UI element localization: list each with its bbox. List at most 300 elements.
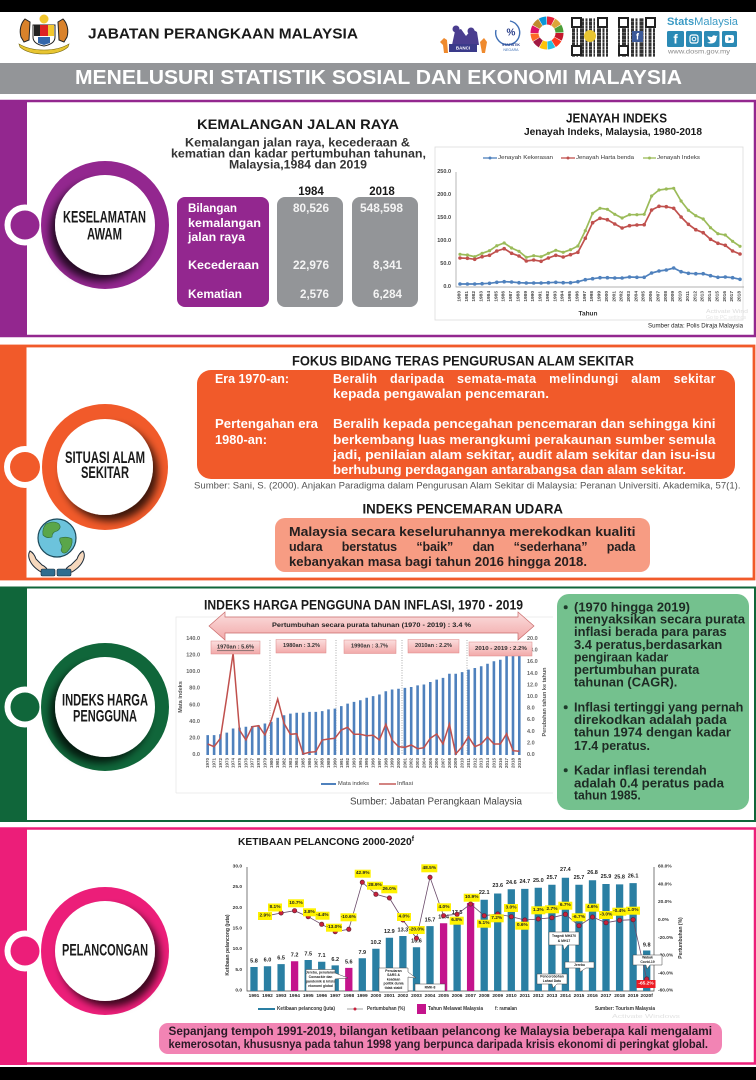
x axis years: 1979 [262,758,267,768]
combo chart: tourist arrivals: 28.9% [368,882,383,888]
x axis years: 1999 [390,758,395,768]
combo chart: tourist arrivals: 6.8% [451,917,463,923]
icon: QR code two: f [636,32,640,42]
bar value labels: 25.9 [601,874,611,880]
section badge: indeks harga pengguna: PENGGUNA [73,706,137,726]
combo chart: tourist arrivals: Tragedi MH370 [552,934,576,938]
left axis labels: 30.0 [233,864,242,870]
right axis labels: -60.0% [658,988,674,994]
x axis years: 1995 [364,758,369,768]
combo chart: tourist arrivals: & MH17 [558,939,570,943]
text block: environmental focus eras: Beralih kepada pencegahan pencemaran dan sehingga kini [333,417,716,431]
text block: inflation findings: direkodkan adalah pada [574,713,728,727]
combo chart: tourist arrivals: 2.9% [260,912,271,918]
x axis years: 2016 [722,291,728,302]
text block: inflation findings: menyaksikan secara purata [574,613,746,627]
bar value labels: 10.6 [411,938,422,944]
combo chart: tourist arrivals: Jerebu [574,963,585,967]
text block: air quality: kebanyakan masa bagi tahun 2016 hingga 2018. [289,555,587,569]
table: road accidents: 80,526 [293,201,329,215]
x axis years: 2002 [398,993,409,999]
combo chart: tourist arrivals: pandemik & krisis [306,980,335,984]
x axis years [205,758,522,768]
header: department logo and name [19,14,739,56]
text block: inflation findings: 17.4 peratus. [574,739,650,753]
decade growth labels: 1970an : 5.6% [217,644,254,650]
y axis left labels: 120.0 [186,653,200,659]
combo chart: tourist arrivals: Penularan [385,969,402,973]
y axis right labels: 20.0 [527,636,538,642]
x axis years: 1986 [501,291,507,302]
combo chart: tourist arrivals: Pencerobohan [540,974,564,978]
icon: hari statistik negara: NEGARA [503,48,519,52]
heading: jenayah indeks: JENAYAH INDEKS [566,110,667,126]
icon: earth in hands [29,519,84,576]
bar value labels: 25.8 [614,874,625,880]
x axis years: 2008 [663,291,669,302]
decade growth labels: 2010an : 2.2% [415,643,452,649]
x axis years: 1991 [249,993,260,999]
combo chart: tourist arrivals: politik dunia [384,982,404,986]
section badge: keselamatan awam: KESELAMATAN [63,208,146,226]
y axis left labels: 0.0 [192,752,200,758]
x axis years: 1985 [301,758,306,768]
bar value labels: 9.8 [643,942,651,948]
x axis years: 2000 [371,993,382,999]
y axis right labels: 14.0 [527,671,538,677]
combo chart: tourist arrivals: RMK-8 [425,986,435,990]
x axis years: 2007 [440,758,446,768]
chart legend: Inflasi [397,781,413,787]
x axis years: 1984 [486,291,492,302]
x axis years: 1973 [224,758,229,768]
text block: tourism summary [159,1023,722,1054]
y axis right labels: 16.0 [527,659,538,665]
right axis labels: -40.0% [658,970,674,976]
panel: keselamatan awam [0,100,755,337]
text block: environmental focus eras: Pertengahan era [215,417,319,431]
line chart: jenayah indeks: 150.0 [437,215,451,221]
x axis years: 1994 [289,993,300,999]
combo chart: tourist arrivals: Lahad Datu [543,979,561,983]
StatsMalaysia brand: www.dosm.gov.my [667,48,731,56]
StatsMalaysia brand [667,16,739,56]
x axis years: 2009 [670,291,676,302]
subheading: table description [171,138,426,172]
subheading: jenayah indeks chart: Jenayah Indeks, Malaysia, 1980-2018 [524,126,702,138]
x axis years: 1982 [282,758,286,768]
x axis years: 1998 [383,758,388,768]
chart legend: Jenayah Kekerasan [498,155,553,161]
x axis years: 2004 [421,758,426,768]
x axis years: 1976 [243,758,248,768]
x axis years: 1994 [358,758,363,768]
text block: inflation findings: pertumbuhan purata [574,663,700,677]
x axis years: 2010 [506,993,517,999]
x axis years: 2004 [633,291,639,302]
combo chart: cpi bars and inflation line [176,612,553,793]
x axis years: 2007 [656,291,662,302]
x axis years: 2019 [517,758,522,768]
y axis left labels [186,636,200,758]
left axis labels: 5.0 [235,967,242,973]
title banner: MENELUSURI STATISTIK SOSIAL DAN EKONOMI MALAYSIA [75,67,682,89]
x axis years: 2017 [504,758,509,768]
combo chart: tourist arrivals: -3.0% [600,912,613,918]
label: 2020 decline: -65.2% [638,980,654,986]
x axis years: 2014 [485,758,490,768]
combo chart: tourist arrivals: 42.9% [356,870,370,876]
table: road accidents: 2018 [369,186,395,198]
x axis years: 1981 [464,291,470,302]
x axis years: 1994 [560,291,566,302]
series: arrivals bars [254,878,647,991]
table: road accidents: 548,598 [360,201,403,215]
x axis years: 2003 [415,758,420,768]
chart legend: Pertumbuhan (%) [367,1006,405,1012]
x axis years: 2016 [498,758,503,768]
source: jabatan perangkaan malaysia: Sumber: Jabatan Perangkaan Malaysia [350,796,522,808]
chart legend: f: ramalan [495,1006,517,1012]
y axis right labels: 0.0 [527,752,535,758]
table: road accidents: Bilangan [188,201,237,215]
x axis years: 2013 [700,291,706,302]
left axis labels: 20.0 [233,905,242,911]
bar value labels: 5.8 [250,958,258,964]
combo chart: tourist arrivals: ekonomi global [308,984,333,988]
y axis right labels: 8.0 [527,706,535,712]
combo chart: tourist arrivals: 48.5% [422,865,437,871]
x axis years: 1980 [456,291,462,302]
x axis years: 2013 [479,758,484,768]
bar value labels: 6.2 [331,957,339,963]
icon: hari statistik negara: STATISTIK [502,43,520,47]
series: visit malaysia year bars [295,903,471,991]
text block: inflation findings: tahun 1974 dengan kadar [574,726,731,740]
x axis years: 2014 [707,291,713,302]
y axis right labels: 4.0 [527,729,535,735]
y axis left labels: 100.0 [186,669,200,675]
x axis years: 1999 [596,291,602,302]
heading: fokus bidang teras: FOKUS BIDANG TERAS PENGURUSAN ALAM SEKITAR [292,354,634,368]
department name: JABATAN PERANGKAAN MALAYSIA [88,26,358,42]
x axis years: 1974 [231,758,236,768]
heading: ketibaan pelancong: KETIBAAN PELANCONG 2000-2020 [238,836,415,848]
series: inflasi line [208,653,519,754]
bar value labels: 24.6 [506,880,517,886]
combo chart: tourist arrivals: 3.8% [304,909,315,915]
x axis years: 1985 [493,291,499,302]
series: mata indeks bars [208,654,519,755]
series: jenayah harta benda [460,206,740,261]
top black bar [0,0,756,12]
series: growth line [268,877,647,979]
bar value labels: 7.5 [304,952,312,958]
text block: inflation findings: pengiraan kadar [574,650,668,664]
x axis years: 2000 [604,291,610,302]
x axis years: 1998 [589,291,595,302]
combo chart: tourist arrivals: -10.6% [341,914,357,920]
section badge: situasi alam sekitar [4,404,168,530]
text block: environmental focus eras: Beralih daripada semata-mata melindungi alam sekitar [333,372,716,386]
x axis years: 1993 [552,291,558,302]
panel: pelancongan [0,828,755,1065]
chart legend [258,1004,655,1014]
combo chart: tourist arrivals: tidak stabil [385,986,402,990]
chart legend: Ketibaan pelancong (juta) [277,1006,335,1012]
combo chart: tourist arrivals: Jerebu, penularan [306,970,335,974]
table: road accidents: Kecederaan [188,258,259,272]
combo chart: tourist arrivals: 10.9% [465,894,479,900]
y axis right labels: 18.0 [527,648,538,654]
source: sani 2000: Sumber: Sani, S. (2000). Anjakan Paradigma dalam Pengurusan Alam Sekitar di Malaysia: Peranan Universiti. Akademika, 57(1). [194,480,740,492]
text block: air quality [275,518,650,572]
x axis years: 2011 [520,993,530,999]
chart legend: Sumber: Tourism Malaysia [595,1006,655,1012]
panel: situasi alam sekitar [0,345,754,580]
y axis left labels: 20.0 [189,735,200,741]
line chart: jenayah indeks: Activate Wind [706,309,748,315]
bar value labels: 17.5 [452,910,462,916]
y axis left labels: 60.0 [189,702,200,708]
chart legend: Jenayah Harta benda [576,155,635,161]
right axis labels: 60.0% [658,864,672,870]
x axis years: 1991 [538,291,544,302]
left axis labels: 10.0 [233,946,242,952]
combo chart: tourist arrivals: keadaan [387,978,400,982]
x axis years: 2012 [472,758,477,768]
combo chart: tourist arrivals: 4.0% [439,904,450,910]
x axis years: 2007 [465,993,476,999]
x axis years: 2008 [479,993,490,999]
x axis years: 1989 [523,291,529,302]
chart legend: Mata indeks [338,781,369,787]
x axis years: 1980 [269,758,274,768]
icon: coat of arms [19,14,69,54]
bar value labels: 26.8 [587,870,598,876]
text block: inflation findings: (1970 hingga 2019) [574,600,690,614]
x axis years: 1998 [343,993,354,999]
y axis right labels: 2.0 [527,740,535,746]
line chart: jenayah indeks: 250.0 [437,169,451,175]
bar value labels: 22.1 [479,890,490,896]
x axis years: 2017 [601,993,612,999]
x axis years: 1997 [330,993,341,999]
text block: inflation findings: Kadar inflasi terendah [574,763,707,777]
table: road accidents: 8,341 [373,258,402,272]
x axis years: 1982 [471,291,477,302]
y axis right labels: 12.0 [527,682,538,688]
combo chart: cpi bars and inflation line: Perubahan tahun ke tahun [542,667,548,737]
x axis years: 2013 [547,993,558,999]
x axis years: 2011 [685,291,691,301]
x axis years: 1995 [303,993,314,999]
text block: environmental focus eras: Era 1970-an: [215,372,289,386]
x axis years: 1989 [326,758,331,768]
text block: environmental focus eras: jadi, penilaian alam sekitar, audit alam sekitar dan isu-isu [332,448,716,462]
x axis years: 1997 [377,758,382,768]
line chart: jenayah indeks: 200.0 [437,192,451,198]
x axis years: 1999 [357,993,368,999]
x axis years: 1991 [339,758,344,768]
combo chart: tourist arrivals: 2.7% [547,906,558,912]
x axis years: 2001 [384,993,395,999]
combo chart: tourist arrivals: 26.0% [382,886,397,892]
x axis years: 1983 [479,291,485,302]
x axis years: 1993 [352,758,356,768]
table: road accidents: jalan raya [187,230,245,244]
series: jenayah kekerasan [460,268,740,284]
bar value labels: 7.9 [358,950,366,956]
icon: SDG wheel [534,20,560,46]
chart legend: Tahun Melawat Malaysia [428,1006,483,1012]
decade dividers [270,640,467,755]
text block: environmental focus eras [197,370,735,479]
text block: environmental focus eras: 1980-an: [215,433,267,447]
x axis years: 2008 [447,758,452,768]
arrow: average annual growth [209,612,534,640]
text block: inflation findings: inflasi berada para paras [574,625,727,639]
x axis years: 2018 [510,758,516,768]
x axis years: 2004 [425,993,436,999]
text block: tourism summary: Sepanjang tempoh 1991-2019, bilangan ketibaan pelancong ke Malaysia beberapa kali mengalami [168,1026,712,1038]
line chart: jenayah indeks: 0.0 [443,284,451,290]
left axis labels: 0.0 [235,988,242,994]
x axis years: 2003 [626,291,632,302]
x axis years: 1988 [516,291,522,302]
icon: QR code two [618,18,656,55]
text block: inflation findings: Inflasi tertinggi yang pernah [574,700,743,714]
text block: inflation findings: tahunan (CAGR). [574,676,677,690]
x axis years: 1995 [567,291,573,302]
x axis years: 1988 [320,758,325,768]
x axis years: 2016 [587,993,598,999]
combo chart: tourist arrivals: 5.1% [479,920,490,926]
label: 2020 decline [636,980,656,988]
decade growth labels [211,640,532,656]
line chart: jenayah indeks: 50.0 [440,261,451,267]
x axis years: 1986 [307,758,312,768]
combo chart: tourist arrivals: -0.4% [613,908,626,914]
heading: indeks pencemaran udara: INDEKS PENCEMARAN UDARA [362,502,563,516]
x axis years: 1971 [212,758,217,768]
section badge: pelancongan: PELANCONGAN [62,940,148,960]
x axis years: 2020f [641,993,653,999]
bar value labels: 10.2 [371,940,381,946]
bottom black bar [0,1067,756,1080]
table: road accidents: 2,576 [300,287,329,301]
arrow: average annual growth: Pertumbuhan secara purata tahunan (1970 - 2019) : 3.4 % [272,623,472,629]
line chart: jenayah indeks: Go to PC settings [706,315,747,321]
x axis years: 2017 [729,291,735,302]
x axis years: 1996 [316,993,327,999]
combo chart: tourist arrivals: 3.0% [506,904,517,910]
x axis years: 2002 [619,291,625,302]
text block: inflation findings: adalah 0.4 peratus pada [574,777,725,791]
chart legend: Jenayah Indeks [657,155,700,161]
combo chart: tourist arrivals: 1.3% [533,907,544,913]
bar value labels: 5.6 [345,960,353,966]
y axis right labels [527,636,538,758]
text block: inflation findings: 3.4 peratus,berdasarkan [574,638,722,652]
combo chart: tourist arrivals: Ketibaan pelancong (juta) [225,914,231,976]
right axis labels: 0.0% [658,917,670,923]
x axis years: 2005 [428,758,433,768]
combo chart: tourist arrivals: -20.0% [409,926,425,932]
x axis years: 2018 [736,291,742,302]
x axis years: 1993 [276,993,287,999]
bar value labels: 13.3 [398,928,408,934]
x axis years: 2014 [560,993,571,999]
subheading: table description: Malaysia,1984 dan 2019 [229,160,367,172]
x axis years: 2003 [411,993,422,999]
subheading: table description: kematian dan kadar pertumbuhan tahunan, [171,148,426,160]
icon: banci logo: BANCI [456,46,470,50]
bar value labels: 25.7 [547,875,557,881]
bar value labels: 12.9 [384,929,395,935]
right axis labels: 20.0% [658,899,672,905]
text block: environmental focus eras: kepada pengawalan pencemaran. [333,387,549,401]
combo chart: tourist arrivals: Covid-19 [640,960,655,964]
x axis years: 2015 [574,993,585,999]
section badge: situasi alam sekitar: SITUASI ALAM [65,449,145,467]
bar value labels: 24.7 [519,879,530,885]
table: road accidents [177,186,418,307]
x axis years: 1996 [574,291,580,302]
combo chart: tourist arrivals: 7.2% [491,915,503,921]
x axis years: 1990 [332,758,337,768]
bar value labels: 26.1 [628,874,638,880]
right axis labels [658,864,674,994]
source: polis diraja malaysia: Sumber data: Polis Diraja Malaysia [648,322,743,330]
x axis years: 2010 [460,758,465,768]
panel: indeks harga pengguna [0,586,755,822]
x axis years: 2005 [641,291,647,302]
x axis years: 2015 [714,291,720,302]
x axis years: 1972 [218,758,223,768]
x axis years: 1992 [545,291,551,302]
table: road accidents: kemalangan [188,216,261,230]
x axis years: 1975 [237,758,242,768]
x axis years: 2015 [491,758,496,768]
x axis years: 2001 [611,291,617,302]
combo chart: tourist arrivals: 8.1% [270,904,281,910]
x axis years: 2002 [409,758,414,768]
x axis years: 1992 [262,993,273,999]
x axis years: 2001 [402,758,407,768]
bar value labels: 7.1 [318,953,326,959]
combo chart: tourist arrivals: -13.0% [326,924,342,930]
x axis years: 1970 [205,758,210,768]
heading: kemalangan jalan raya: KEMALANGAN JALAN RAYA [197,116,399,132]
y axis right labels: 10.0 [527,694,538,700]
section badge: keselamatan awam [4,161,169,289]
x axis years: 1987 [313,758,318,768]
left axis labels: 25.0 [233,884,242,890]
text block: environmental focus eras: berhubung perdagangan antarabangsa dan alam sekitar. [333,463,686,477]
left axis labels [233,864,242,994]
x axis years: 1984 [294,758,299,768]
x axis years: 2009 [453,758,458,768]
x axis years: 1990 [530,291,536,302]
section badge: indeks harga pengguna: INDEKS HARGA [62,690,148,710]
x axis years: 1996 [371,758,376,768]
x axis years: 1983 [288,758,293,768]
x axis years [249,993,653,999]
line chart: jenayah indeks [435,147,748,321]
right axis labels: 40.0% [658,882,672,888]
x axis years [456,291,742,302]
